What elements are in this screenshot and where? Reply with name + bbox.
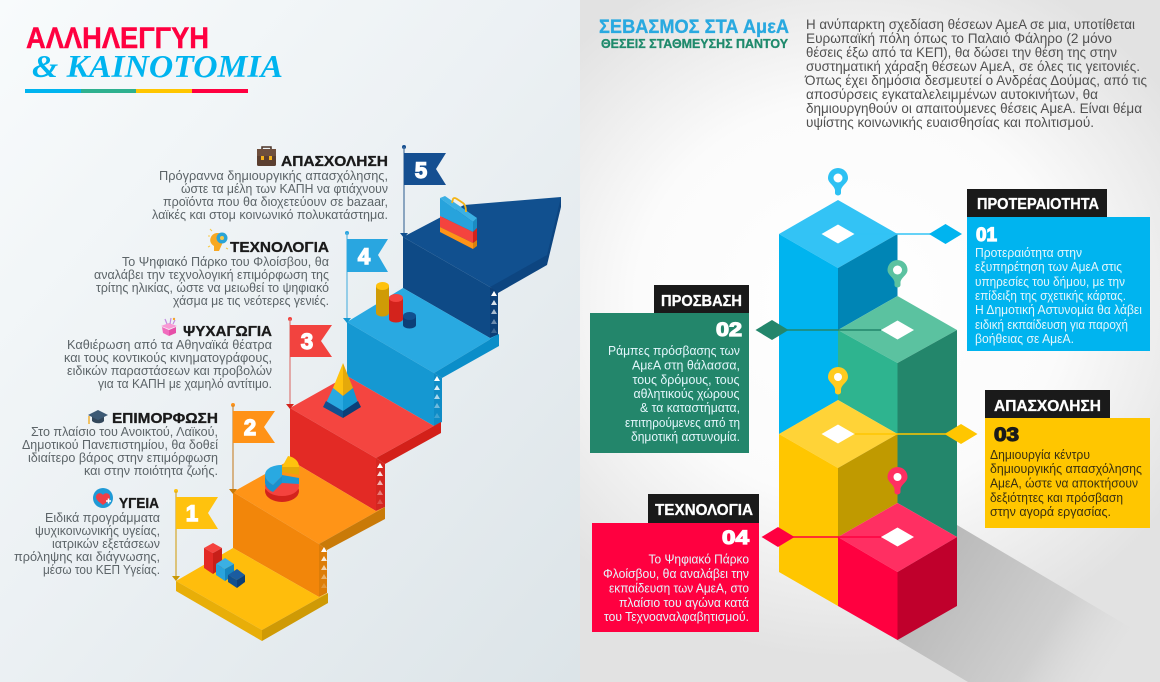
text: access: αθλητικούς χώρους [634,386,740,401]
label: employment [985,390,1110,418]
text: priority: υπηρεσίες του δήμου, με την [975,274,1125,289]
text: employment: ΑμεΑ, ώστε να αποκτήσουν [990,476,1138,490]
flag 3 [286,317,332,409]
text: employment: στην αγορά εργασίας. [990,504,1111,519]
intro paragraph: υψίστης κοινωνικής ευαισθησίας και πολιτισμού. [806,114,1094,130]
text: entertainment: ειδικών παραστάσεων και προβολών [67,363,272,378]
connector 01 [855,224,962,244]
panel: employment 03 [985,390,1150,528]
block: entertainment [64,318,272,391]
intro paragraph: δημιουργηθούν οι απαιτούμενες θέσεις ΑμεΑ. Είναι θέμα [806,100,1142,116]
intro paragraph: Ευρωπαϊκή πόλη όπως το Παλαιό Φάληρο (2 μόνο [806,30,1112,46]
heading: entertainment: ΨΥΧΑΓΩΓΙΑ [183,323,272,340]
panel: access 02 [590,285,749,453]
text: training [22,424,218,478]
text: training: Στο πλαίσιο του Ανοικτού, Λαϊκού, [31,424,218,439]
step 3 red [290,376,441,511]
step 1 yellow [176,548,328,641]
text: access: & τα καταστήματα, [640,400,740,415]
white diamonds on cubes [822,224,914,546]
number 03: 03 [994,425,1019,446]
text: employment [152,168,388,222]
right heading: ΘΕΣΕΙΣ ΣΤΑΘΜΕΥΣΗΣ ΠΑΝΤΟΥ [601,36,788,51]
flag 2 [229,403,275,494]
label: technology [648,494,759,523]
text: technology [94,254,329,308]
isometric cube tower [779,200,957,640]
cube shadow [897,525,1160,682]
text: employment: Δημιουργία κέντρυ [990,447,1090,462]
title: & ΚΑΙΝΟΤΟΜΙΑ [32,48,283,84]
step 4 blue [347,288,499,426]
title colour bar [25,89,248,93]
blue cube [779,200,898,434]
text: technology [603,552,749,624]
heading: technology: ΤΕΧΝΟΛΟΓΙΑ [230,239,329,256]
icon: bars on step 1 [204,543,245,588]
label: priority [967,189,1107,217]
panel: technology 04 [592,494,759,632]
intro paragraph: αποσύρσεις εγκαταλελειμμένων αυτοκινήτων, θα [806,86,1098,102]
text: entertainment: Καθιέρωση από τα Αθηναϊκά θέατρα [67,337,272,352]
text: technology: Το Ψηφιακό Πάρκο [648,552,749,566]
intro paragraph: συστηματική χάραξη θέσεων ΑμεΑ, σε όλες τις γειτονιές. [806,58,1140,74]
green cube [838,296,957,537]
text: technology: πλαίσιο του αγώνα κατά [619,595,749,610]
yellow cube [779,400,898,606]
flag 1 [172,489,218,581]
left panel background [0,0,580,682]
text: employment: προϊόντα που θα διοχετεύουν σε bazaar, [163,194,388,209]
pin: red [888,467,908,494]
text: employment: ώστε τα μέλη των ΚΑΠΗ να φτιάχνουν [181,181,388,196]
number 01: 01 [976,225,997,246]
intro paragraph: Η ανύπαρκτη σχεδίαση θέσεων ΑμεΑ σε μια, υποτίθεται [806,16,1135,32]
text: entertainment: για τα ΚΑΠΗ με χαμηλό αντίτιμο. [98,376,272,391]
right heading: ΣΕΒΑΣΜΟΣ ΣΤΑ ΑμεΑ [599,17,789,38]
text: health [14,510,160,577]
flag 5 [400,145,446,238]
text: employment: δεξιότητες και πρόσβαση [990,490,1123,505]
icon: light bulb and gear [208,229,228,251]
text: entertainment: και τους κοντικούς κινηματογράφους, [64,350,272,365]
connector 03 [855,424,978,444]
text: priority: βοήθειας σε ΑμεΑ. [975,331,1074,346]
text: technology: τρίτης ηλικίας, ώστε να μειωθεί το ψηφιακό [96,280,329,295]
block: technology [94,229,329,308]
intro paragraph: θέσεις έξω από τα ΚΕΠ), θα δώσει την θέση της στην [806,44,1117,60]
text: technology: Φλοίσβου, θα αναλάβει την [603,566,749,581]
text: access: Ράμπες πρόσβασης των [608,343,740,358]
text: technology: Το Ψηφιακό Πάρκο του Φλοίσβου, θα [122,254,329,269]
text: health: ιατρικών εξετάσεων [52,536,160,551]
heading: health: ΥΓΕΙΑ [119,495,159,512]
connector 02 [756,320,881,340]
right panel background [580,0,1160,682]
label: access [654,285,749,313]
flag 3: 3 [301,329,313,354]
panel: priority 01 [967,189,1150,351]
label: employment: ΑΠΑΣΧΟΛΗΣΗ [994,398,1101,415]
block: employment [152,147,388,222]
text: access: τους δρόμους, τους [632,372,740,387]
icon: heart [93,488,113,508]
icon: pie chart on step 2 [265,456,299,502]
text: training: και στην ποιότητα ζωής. [84,463,218,478]
flag 2: 2 [244,415,256,440]
title: ΑΛΛΗΛΕΓΓΥΗ [26,22,209,55]
pin: green [888,260,908,288]
text: health: μέσω του ΚΕΠ Υγείας. [43,562,160,577]
isometric staircase [176,197,561,641]
intro paragraph [804,16,1147,130]
title [26,22,283,84]
text: priority: εξυπηρέτηση των ΑμεΑ στις [975,259,1122,274]
text: entertainment [64,337,272,391]
number 02: 02 [716,320,742,341]
text: employment: Πρόγραννα δημιουργικής απασχόλησης, [159,168,388,183]
step 5 navy [403,197,561,342]
text: health: πρόληψης και διάγνωσης, [14,549,160,564]
text: priority: ειδική εκπαίδευση για παροχή [975,317,1128,332]
text: access [608,343,740,444]
text: priority [975,245,1142,346]
text: technology: εκπαίδευση των ΑμεΑ, στο [609,580,749,596]
number 04: 04 [722,528,750,549]
right heading [599,17,789,51]
heading: training: ΕΠΙΜΟΡΦΩΣΗ [112,410,218,427]
text: technology: αναλάβει την τεχνολογική επιμόρφωση της [94,267,329,282]
step arrow markers [321,291,497,588]
text: employment: λαϊκές και στομ κοινωνικό πολυκατάστημα. [152,207,388,222]
text: priority: Η Δημοτική Αστυνομία θα λάβει [975,302,1142,317]
icon: briefcase [257,147,276,166]
icon: cylinders on step 4 [376,282,416,328]
text: health: Ειδικά προγράμματα [45,510,160,525]
pin: blue [828,168,848,196]
text: training: Δημοτικού Πανεπιστημίου, θα δοθεί [22,437,218,452]
block: training [22,410,218,478]
heading: employment: ΑΠΑΣΧΟΛΗΣΗ [281,153,388,170]
text: technology: χάσμα με τις νεότερες γενιές. [173,293,329,308]
flag 1: 1 [186,501,198,526]
label: access: ΠΡΟΣΒΑΣΗ [661,293,742,310]
text: training: ιδιαίτερο βάρος στην επιμόρφωση [28,450,218,465]
label: priority: ΠΡΟΤΕΡΑΙΟΤΗΤΑ [977,196,1099,213]
text: access: δημοτική αστυνομία. [631,429,740,444]
flag 4: 4 [358,244,371,269]
text: employment: δημιουργικής απασχόλησης [990,461,1142,476]
label: technology: ΤΕΧΝΟΛΟΓΙΑ [655,502,753,519]
icon: graduation cap [88,410,108,424]
text: priority: Προτεραιότητα στην [975,245,1082,260]
flag 5: 5 [415,158,427,183]
pin: yellow [828,367,848,394]
icon: pyramid on step 3 [323,363,361,418]
icon: briefcase on step 5 [440,196,477,249]
block: health [14,488,160,577]
text: employment [990,447,1142,519]
red cube [838,503,957,640]
step 2 orange [233,460,385,597]
text: priority: επίδειξη της σχετικής κάρτας. [975,288,1126,303]
intro paragraph: Όπως έχει δημόσια δεσμευτεί ο Ανδρέας Δούμας, από τις [804,72,1147,88]
text: access: ΑμεΑ στη θάλασσα, [632,358,740,372]
text: technology: του Τεχνοαναλφαβητισμού. [604,609,749,624]
icon: gift box [161,318,177,336]
connector 04 [762,527,881,547]
flag 4 [343,231,388,323]
text: access: επιτηρούμενες από τη [625,415,740,430]
text: health: ψυχικοινωνικής υγείας, [35,523,160,538]
